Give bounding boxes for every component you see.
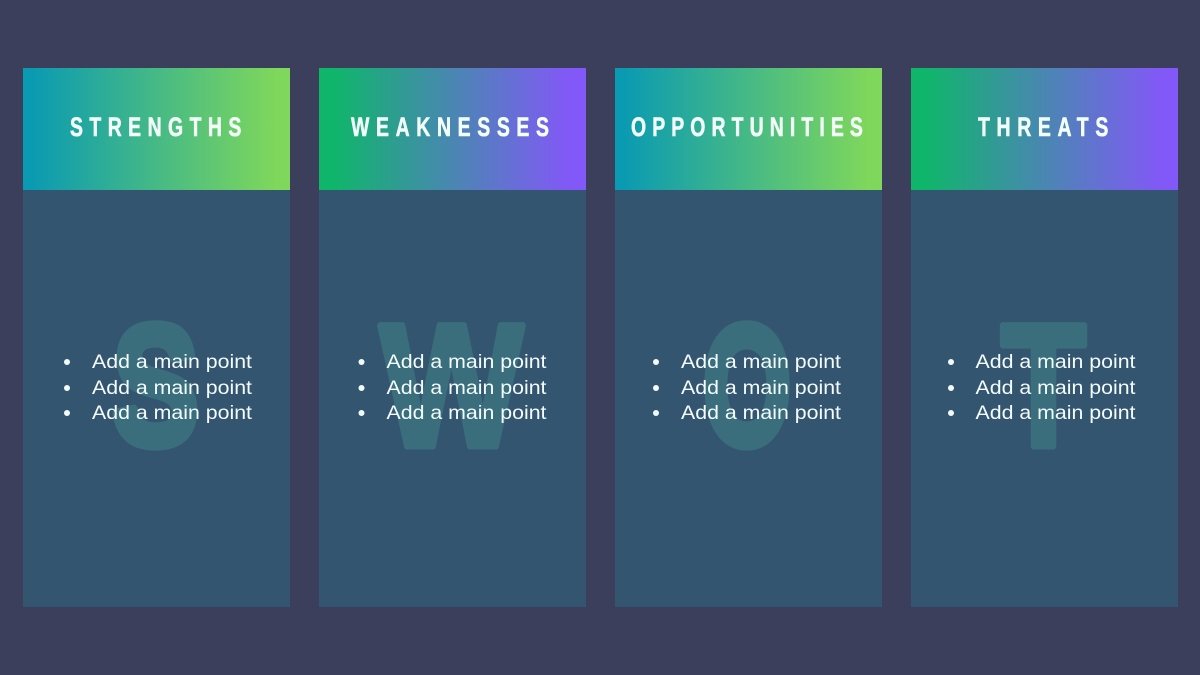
heading: strengths: STRENGTHS — [70, 112, 241, 142]
panel body: strengths — [23, 190, 290, 607]
panel body: threats — [911, 190, 1178, 607]
header band: threats — [911, 68, 1178, 190]
panel: strengths — [23, 68, 290, 607]
heading: opportunities: OPPORTUNITIES — [631, 112, 863, 142]
heading: threats: THREATS — [978, 112, 1108, 142]
bullet list: strengths: Add a main point — [92, 377, 253, 399]
heading: weaknesses: WEAKNESSES — [351, 112, 549, 142]
panel body: weaknesses — [319, 190, 586, 607]
watermark letter S: S — [112, 291, 198, 481]
bullet list: opportunities — [653, 351, 842, 424]
bullet list: strengths — [64, 351, 253, 424]
bullet list: weaknesses: Add a main point — [386, 351, 547, 373]
watermark letter O: O — [703, 291, 791, 481]
header band: opportunities — [615, 68, 882, 190]
header band: strengths — [23, 68, 290, 190]
panel body: opportunities — [615, 190, 882, 607]
header band: weaknesses — [319, 68, 586, 190]
bullet list: opportunities: Add a main point — [681, 402, 842, 424]
watermark letter T: T — [1001, 289, 1086, 484]
bullet list: strengths: Add a main point — [92, 402, 253, 424]
bullet list: threats — [948, 351, 1136, 424]
bullet list: strengths: Add a main point — [92, 351, 253, 373]
bullet list: threats: Add a main point — [976, 402, 1136, 424]
bullet list: threats: Add a main point — [976, 351, 1136, 373]
bullet list: weaknesses: Add a main point — [386, 377, 547, 399]
bullet list: threats: Add a main point — [976, 377, 1136, 399]
watermark letter W: W — [380, 289, 523, 484]
bullet list: opportunities: Add a main point — [681, 351, 842, 373]
panel: threats — [911, 68, 1178, 607]
bullet list: opportunities: Add a main point — [681, 377, 842, 399]
bullet list: weaknesses: Add a main point — [386, 402, 547, 424]
panel: weaknesses — [319, 68, 586, 607]
panel: opportunities — [615, 68, 882, 607]
bullet list: weaknesses — [358, 351, 547, 424]
